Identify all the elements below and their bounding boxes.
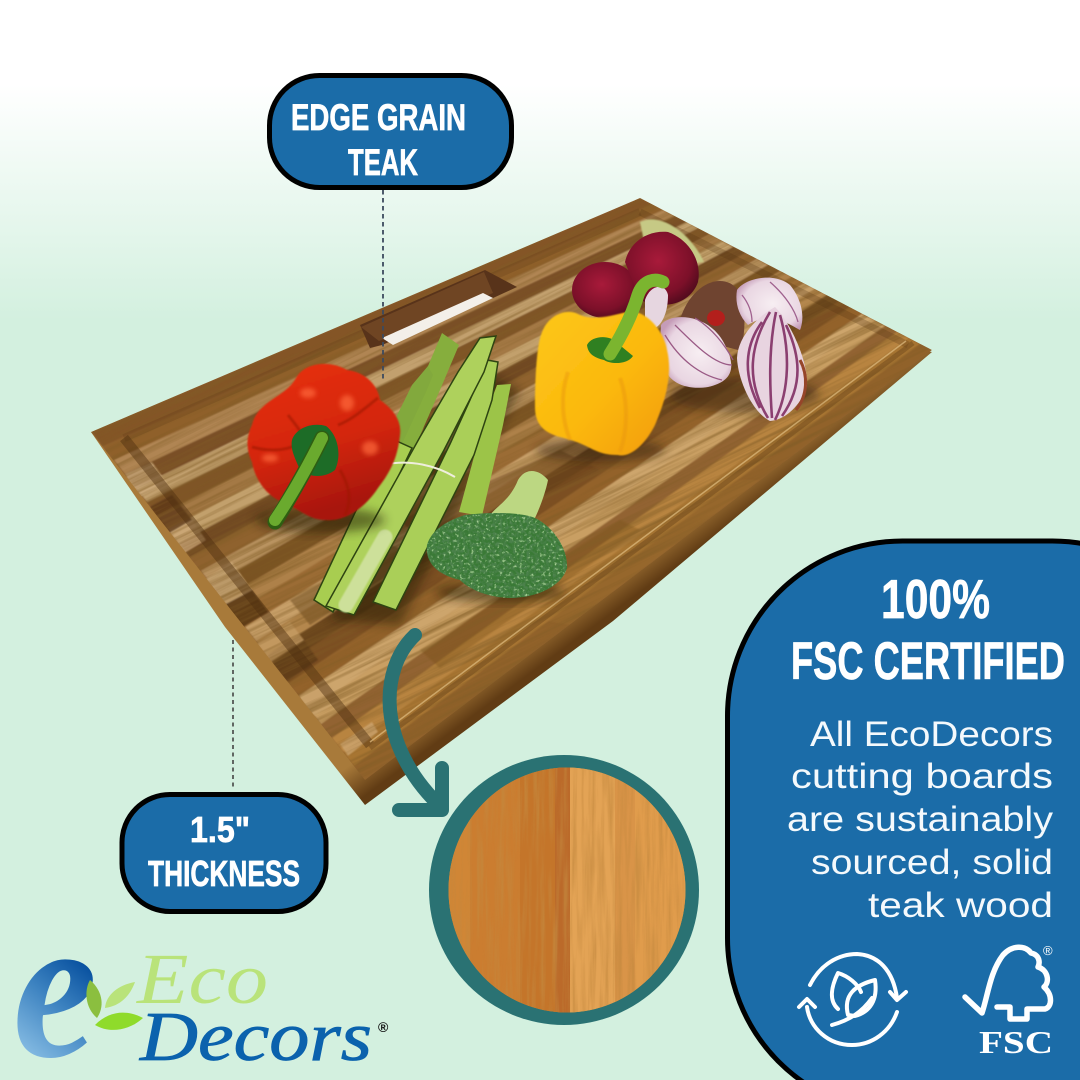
cutting board bbox=[91, 198, 932, 805]
asparagus shadow bbox=[330, 370, 520, 625]
yellow pepper calyx bbox=[587, 337, 633, 363]
brown onion skin bbox=[680, 281, 744, 350]
icon: recycling leaf bbox=[799, 954, 906, 1045]
callout: thickness bbox=[122, 794, 326, 912]
curved arrow to grain detail bbox=[390, 635, 442, 810]
red bell pepper bbox=[248, 364, 400, 533]
icon: FSC tree logo: ® bbox=[1043, 943, 1053, 958]
red pepper shadow bbox=[255, 507, 385, 533]
red pepper stem bbox=[275, 438, 322, 522]
spear B2 bbox=[372, 366, 433, 474]
panel heading bbox=[791, 568, 1065, 691]
halved onion bbox=[660, 317, 733, 388]
base tint bbox=[346, 537, 385, 605]
pepper folds bbox=[563, 372, 626, 452]
broccoli stalk bbox=[490, 471, 548, 518]
twine bbox=[388, 463, 455, 477]
icon: FSC tree logo: FSC bbox=[979, 1024, 1053, 1060]
callout: thickness: THICKNESS bbox=[148, 853, 300, 894]
onion wedge top bbox=[736, 278, 802, 330]
white onion piece bbox=[645, 287, 668, 330]
spear B bbox=[388, 333, 459, 472]
wood grain texture bbox=[91, 198, 929, 770]
registered mark: ® bbox=[378, 1019, 389, 1035]
panel body text: are sustainably bbox=[787, 800, 1054, 839]
spear A bbox=[314, 438, 412, 612]
handle slot bbox=[360, 270, 517, 348]
spear D bbox=[373, 360, 498, 610]
board top face with wood strips bbox=[91, 198, 932, 780]
wood grain detail circle bbox=[429, 755, 699, 1025]
callout: thickness: 1.5" bbox=[190, 809, 250, 850]
callout: edge grain teak: EDGE GRAIN bbox=[291, 97, 466, 138]
leader line: thickness bbox=[232, 640, 234, 790]
logo leaves bbox=[86, 980, 143, 1030]
asparagus bunch bbox=[314, 333, 520, 625]
callout: edge grain teak: TEAK bbox=[348, 142, 418, 183]
EcoDecors logo bbox=[13, 874, 389, 1080]
onion wedge front bbox=[737, 307, 807, 421]
red pepper body bbox=[248, 364, 400, 520]
panel body text: sourced, solid bbox=[811, 843, 1053, 882]
callout: edge grain teak bbox=[270, 76, 512, 188]
broccoli shadow bbox=[435, 582, 565, 602]
juice groove bbox=[124, 212, 913, 748]
broccoli floret bbox=[427, 513, 567, 598]
logo word Decors: Decors bbox=[139, 999, 372, 1076]
panel body text: All EcoDecors bbox=[810, 715, 1053, 754]
red pepper calyx bbox=[292, 425, 338, 476]
pepper lobes bbox=[252, 398, 378, 515]
yellow pepper body bbox=[535, 311, 669, 455]
blue panel: FSC certified bbox=[728, 541, 1080, 1080]
yellow pepper stem bbox=[610, 280, 663, 354]
floret texture bbox=[426, 513, 567, 598]
spear E bbox=[459, 384, 511, 516]
board side face bbox=[91, 300, 932, 805]
onion leaves bbox=[640, 219, 704, 270]
yellow bell pepper bbox=[535, 280, 669, 462]
panel heading: 100% bbox=[881, 568, 990, 630]
highlights bbox=[262, 388, 378, 462]
onions and shallots bbox=[572, 219, 820, 421]
spear C bbox=[326, 336, 496, 615]
panel body text: cutting boards bbox=[791, 757, 1053, 796]
broccoli bbox=[420, 471, 575, 605]
light and dark wood segments bbox=[125, 452, 638, 756]
leader line: edge grain bbox=[382, 190, 384, 380]
logo word Eco: Eco bbox=[136, 939, 268, 1019]
panel body text bbox=[787, 715, 1054, 925]
icon: FSC tree logo bbox=[965, 943, 1053, 1060]
yellow pepper shadow bbox=[535, 438, 665, 462]
red onion right bbox=[625, 232, 699, 305]
panel body text: teak wood bbox=[868, 886, 1053, 925]
onion shadow bbox=[670, 377, 820, 413]
red onion left bbox=[572, 262, 638, 318]
